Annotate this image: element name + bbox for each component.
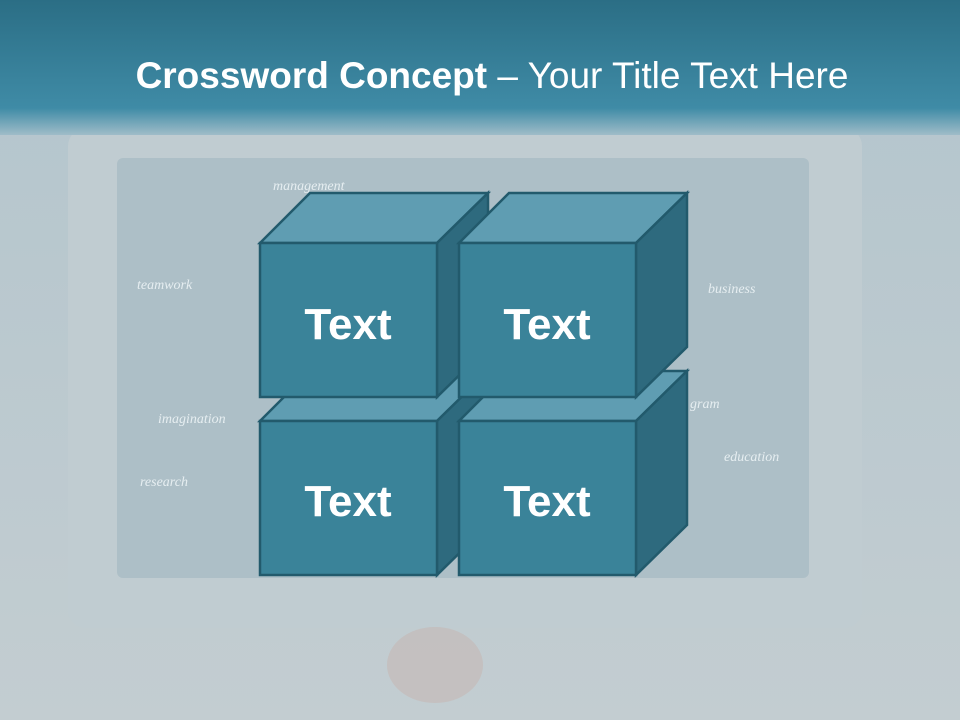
cube bottom-left [260,371,488,575]
cube bottom-right: Text [503,477,591,526]
tablet screen [117,158,809,578]
tablet [68,128,862,628]
sketch labels: gram [690,397,720,412]
sketch labels: research [140,475,188,490]
hand [387,627,483,703]
sketch labels: imagination [158,412,226,427]
header band [0,0,960,135]
cube top-right [459,193,687,397]
cube top-left [260,193,488,397]
sketch labels: education [724,450,779,465]
sketch labels: teamwork [137,278,193,293]
cube bottom-right [459,371,687,575]
sketch labels: business [708,282,756,297]
cube top-left: Text [304,300,392,349]
sketch labels [137,179,779,490]
sketch labels: management [273,179,346,194]
cube bottom-left: Text [304,477,392,526]
title: Crossword Concept – Your Title Text Here [136,55,848,96]
cube top-right: Text [503,300,591,349]
